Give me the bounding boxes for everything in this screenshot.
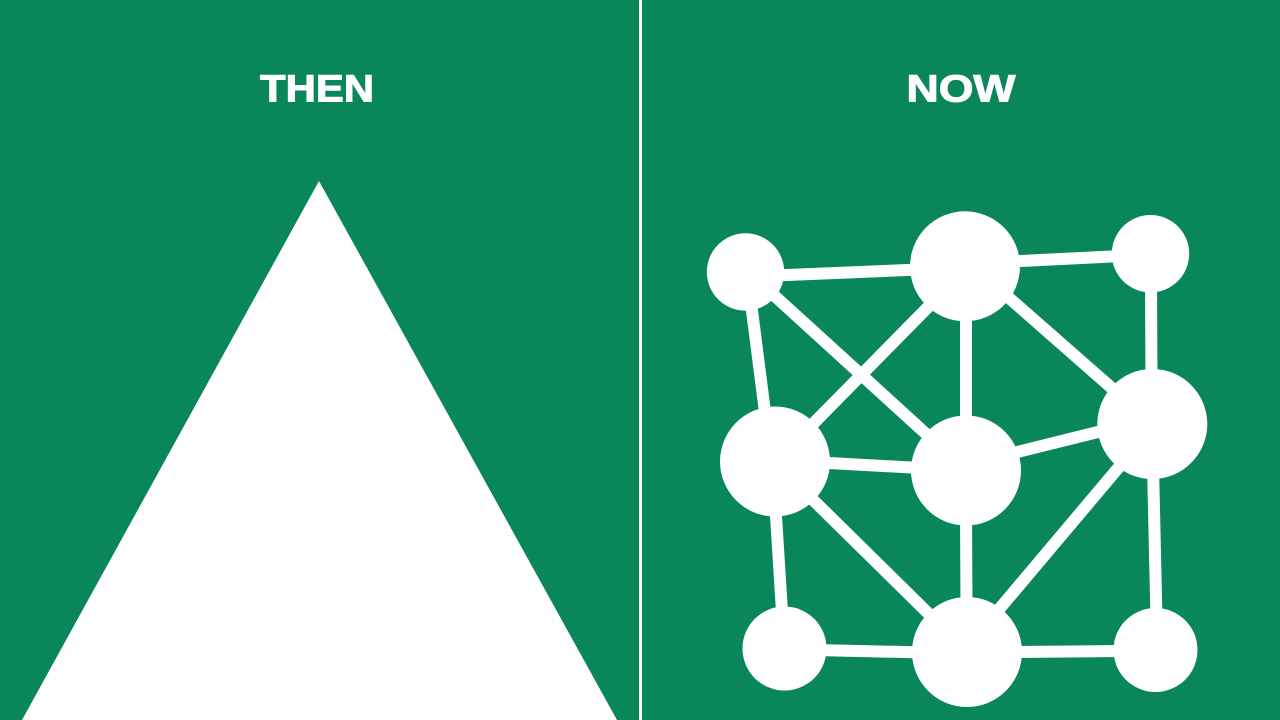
- network nodes: [707, 211, 1207, 707]
- network connections: [750, 256, 1156, 652]
- center divider line: [639, 0, 642, 720]
- heading: NOW: NOW: [906, 68, 1016, 110]
- heading: THEN: THEN: [260, 68, 374, 110]
- network diagram: [707, 211, 1207, 707]
- triangle: hierarchy pyramid: [22, 181, 617, 720]
